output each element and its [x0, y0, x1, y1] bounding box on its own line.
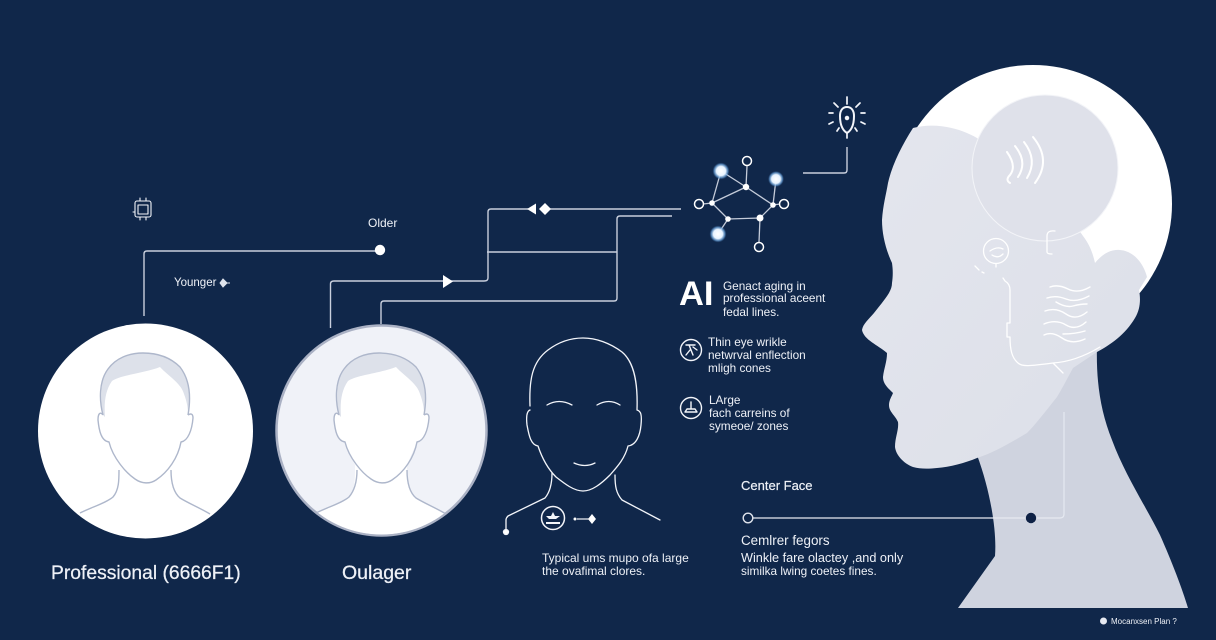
text: center face details: similka lwing coetes fines.	[741, 564, 877, 578]
text: eye wrinkle: mligh cones	[708, 361, 771, 375]
head: inner circle	[972, 95, 1118, 241]
text: large zones: fach carreins of	[709, 406, 790, 420]
text: center face details: Cemlrer fegors	[741, 533, 830, 548]
heading: AI: AI	[679, 275, 714, 313]
head silhouette	[862, 65, 1188, 608]
head: wrinkle lines	[1044, 286, 1090, 342]
icon: AI network	[694, 156, 788, 252]
face outline	[504, 338, 660, 534]
label: older: Older	[368, 216, 397, 230]
icon: chip	[133, 198, 151, 220]
icon: large zones	[680, 398, 702, 418]
head: ear circuit	[975, 231, 1100, 373]
icon: neck marker	[542, 506, 596, 530]
text: center face details: Winkle fare olactey ,and only	[741, 551, 904, 565]
text: AI description: fedal lines.	[723, 305, 779, 319]
label: older portrait: Oulager	[342, 562, 412, 584]
connector: center face line	[743, 412, 1064, 523]
connector: older portrait to network	[330, 203, 681, 328]
connector: bulb to network	[803, 147, 847, 173]
connector: older portrait lower route	[381, 216, 672, 324]
connector: younger to older	[144, 245, 385, 316]
text: large zones: LArge	[709, 393, 741, 407]
text: eye wrinkle: netwrval enflection	[708, 348, 806, 362]
label: center face: Center Face	[741, 478, 813, 493]
label: younger: Younger	[174, 277, 217, 289]
icon: light bulb	[829, 97, 865, 138]
icon: eye wrinkle	[680, 340, 702, 360]
text: typical caption: the ovafimal clores.	[542, 564, 645, 578]
text: AI description: Genact aging in	[723, 279, 806, 293]
portrait: professional	[38, 324, 253, 538]
text: large zones: symeoe/ zones	[709, 419, 788, 433]
text: AI description: professional aceent	[723, 291, 826, 305]
head: brain wave arcs	[1007, 137, 1043, 183]
text: eye wrinkle: Thin eye wrikle	[708, 335, 787, 349]
label: professional: Professional (6666F1)	[51, 563, 241, 584]
portrait: older	[276, 326, 486, 545]
footer credit: Mocanxsen Plan ?	[1111, 617, 1177, 626]
text: typical caption: Typical ums mupo ofa large	[542, 551, 689, 565]
